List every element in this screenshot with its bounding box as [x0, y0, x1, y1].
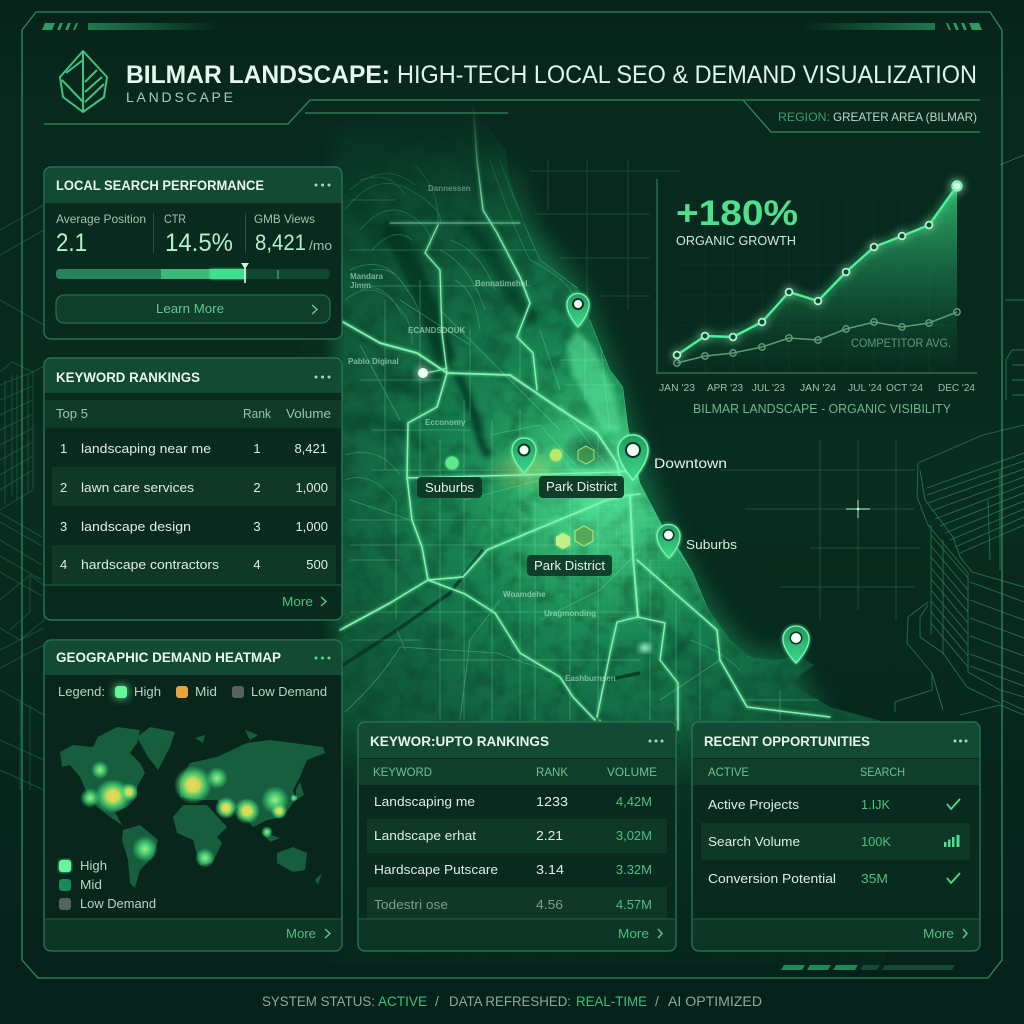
top-right decorative bars [800, 23, 982, 30]
row 4 [367, 887, 667, 919]
row 4: 4.56 [536, 897, 563, 912]
table header: ACTIVE [708, 765, 749, 779]
x axis labels: JAN '23 [659, 382, 695, 394]
row active projects [708, 797, 960, 812]
sea grid upper [530, 160, 680, 310]
top legend: Mid [195, 685, 217, 699]
metric average position [56, 212, 146, 257]
subtitle: LANDSCAPE [126, 89, 233, 105]
row 2 [52, 467, 336, 506]
top legend: High [134, 685, 161, 699]
table header [693, 759, 979, 785]
growth stat: +180% [676, 194, 798, 233]
panel header [45, 640, 341, 675]
map place names: Woamdehe [503, 590, 546, 599]
label park district box lower: Park District [534, 559, 606, 573]
label suburbs box [417, 477, 482, 498]
footer status line: SYSTEM STATUS: [262, 993, 375, 1009]
table header: Top 5 [56, 407, 88, 421]
row 1: 1 [253, 441, 261, 456]
row 1: Landscaping me [374, 794, 475, 809]
row 2: 1,000 [295, 480, 328, 495]
row 1: 1 [60, 441, 67, 456]
table header [359, 759, 675, 785]
chart grid [680, 200, 957, 373]
metric average position: Average Position [56, 212, 146, 226]
label park district box top: Park District [546, 480, 618, 494]
small glow spot [639, 644, 651, 652]
competitor line [674, 309, 960, 366]
label suburbs: Suburbs [686, 537, 738, 552]
light hex marker [556, 533, 570, 549]
growth line [674, 182, 962, 358]
footer status line: / [655, 993, 659, 1009]
metric gmb views: 8,421 [255, 230, 306, 255]
pin suburbs [657, 524, 680, 558]
sea glow [500, 150, 830, 720]
menu dots [314, 656, 330, 660]
panel: keyword rankings [44, 358, 342, 620]
pin north [567, 294, 589, 327]
panel title: RECENT OPPORTUNITIES [704, 734, 870, 749]
city map [324, 106, 882, 846]
footer status line: / [435, 993, 439, 1009]
footer status line [262, 993, 762, 1009]
row 2 [367, 819, 667, 853]
row 4: 4.57M [616, 897, 652, 912]
menu dots [648, 740, 664, 742]
fine street grid [518, 434, 700, 630]
bottom legend: Low Demand [80, 896, 156, 911]
map place names: ECANDSDOUK [408, 326, 466, 335]
footer status line: AI OPTIMIZED [668, 993, 762, 1009]
table header: SEARCH [860, 765, 905, 779]
menu dots [314, 184, 330, 186]
icon: leaf logo [60, 51, 107, 112]
panel: local search performance [44, 167, 342, 339]
panel footer [44, 585, 342, 609]
row 1 [60, 441, 327, 456]
contour lines [345, 160, 740, 670]
decorative isometric buildings left [0, 205, 44, 790]
x axis labels: JAN '24 [800, 382, 836, 394]
panel title: LOCAL SEARCH PERFORMANCE [56, 178, 264, 193]
x axis labels: DEC '24 [938, 382, 975, 394]
panel header [45, 358, 341, 393]
metric average position: 2.1 [56, 229, 87, 257]
menu dots [314, 376, 330, 378]
top legend [58, 685, 327, 699]
main roads [338, 106, 832, 732]
row 1: landscaping near me [81, 441, 211, 456]
heat dot park [550, 449, 562, 461]
panel footer [692, 919, 980, 950]
row search volume [701, 823, 970, 860]
panel title: GEOGRAPHIC DEMAND HEATMAP [56, 650, 281, 665]
title: HIGH-TECH LOCAL SEO & DEMAND VISUALIZATION [397, 61, 977, 89]
row search volume: 100K [861, 834, 891, 849]
top legend: Legend: [58, 685, 105, 699]
panel footer: More [618, 926, 649, 941]
street grid [345, 200, 850, 720]
x axis labels: JUL '23 [752, 382, 785, 394]
row 1: 4,42M [616, 794, 652, 809]
row 4: hardscape contractors [81, 557, 220, 572]
learn more button [56, 295, 330, 323]
table header: Rank [243, 407, 272, 421]
metric ctr: CTR [164, 212, 186, 226]
table header: KEYWORD [373, 765, 432, 779]
row 4: Todestri ose [374, 897, 448, 912]
panel footer [358, 919, 676, 950]
area under growth line [677, 186, 957, 373]
panel: geographic demand heatmap [44, 640, 342, 951]
heat spots [80, 761, 298, 868]
footer status line: REAL-TIME [576, 993, 647, 1009]
world map [60, 727, 325, 888]
row 2: 3,02M [616, 828, 652, 843]
x axis labels: APR '23 [707, 382, 743, 394]
metric ctr: 14.5% [165, 229, 233, 257]
yellow heat glow [490, 450, 560, 492]
metric gmb views: /mo [309, 238, 332, 253]
bottom-right decorative bars [781, 965, 955, 970]
row 4: 500 [306, 557, 328, 572]
metric ctr [164, 212, 233, 257]
dark hex marker one [578, 446, 594, 464]
map place names: Eashburnsen [565, 674, 616, 683]
top legend: Low Demand [251, 685, 327, 699]
table header [45, 400, 341, 428]
panel footer: More [286, 926, 316, 941]
row 3 [60, 519, 328, 534]
map place names [348, 184, 616, 683]
chart caption: BILMAR LANDSCAPE - ORGANIC VISIBILITY [693, 402, 952, 416]
title: BILMAR LANDSCAPE: [126, 61, 390, 89]
panel: keyword upto rankings [358, 722, 676, 951]
panel footer [44, 919, 342, 950]
footer status line: ACTIVE [378, 993, 427, 1009]
table header: Volume [286, 407, 331, 421]
row 2: lawn care services [81, 480, 195, 495]
organic growth chart [657, 179, 977, 416]
pin downtown [618, 435, 648, 480]
map place names: Uragmonding [544, 609, 596, 618]
label suburbs box: Suburbs [425, 481, 474, 495]
chart axes [657, 179, 977, 373]
row conversion potential [708, 871, 960, 886]
panel header [45, 168, 341, 203]
table header: VOLUME [607, 765, 657, 779]
map place names: Pablo Diginal [348, 357, 399, 366]
heat dot suburbs [446, 456, 458, 470]
map place names: Mandara [350, 272, 383, 281]
row 2: 2 [253, 480, 261, 495]
learn more button: Learn More [156, 301, 224, 316]
row 3: Hardscape Putscare [374, 862, 498, 877]
row conversion potential: Conversion Potential [708, 871, 836, 886]
coast line [505, 150, 750, 657]
map details [338, 106, 844, 748]
label downtown: Downtown [654, 456, 727, 471]
row 2: Landscape erhat [374, 828, 476, 843]
label park district box top [539, 476, 624, 498]
row 3: 3 [253, 519, 261, 534]
row 1 [374, 794, 652, 809]
sea grid lower with sparkle [720, 440, 920, 620]
dark heat hole [564, 430, 612, 470]
row 2: 2.21 [536, 828, 563, 843]
x axis labels: OCT '24 [886, 382, 923, 394]
region label: REGION: [778, 110, 830, 124]
dark hex marker two [575, 526, 593, 546]
row 4: 4 [253, 557, 261, 572]
row 3: 1,000 [295, 519, 328, 534]
panel footer: More [282, 594, 313, 609]
competitor label: COMPETITOR AVG. [851, 338, 951, 350]
row active projects: 1.IJK [861, 797, 890, 812]
row 1: 1233 [536, 794, 568, 809]
growth stat label: ORGANIC GROWTH [676, 233, 796, 248]
table header: RANK [536, 765, 568, 779]
terrain blotches [342, 188, 844, 748]
metric gmb views [254, 212, 332, 255]
row 1: 8,421 [294, 441, 327, 456]
bottom legend: High [80, 858, 107, 873]
row active projects: Active Projects [708, 797, 800, 812]
x axis labels [659, 382, 975, 394]
bottom legend [59, 858, 156, 911]
region label: GREATER AREA (BILMAR) [833, 110, 977, 124]
footer status line: DATA REFRESHED: [449, 993, 571, 1009]
panel title: KEYWORD RANKINGS [56, 370, 200, 385]
river [340, 550, 640, 680]
lakefront bright district [567, 330, 622, 432]
row search volume: Search Volume [708, 834, 800, 849]
row 3: 3.32M [616, 862, 652, 877]
pin south [783, 626, 809, 663]
title [126, 61, 977, 89]
menu dots [954, 740, 968, 742]
panel: recent opportunities [692, 722, 980, 951]
panel header [693, 722, 980, 758]
row 3 [374, 862, 652, 877]
row 3: 3.14 [536, 862, 564, 877]
map place names: Ecconomy [425, 418, 466, 427]
map place names: Jimm [350, 281, 371, 290]
downtown glow [518, 404, 661, 568]
row conversion potential: 35M [861, 871, 888, 886]
pin park [512, 438, 536, 473]
decorative isometric buildings right [895, 155, 1024, 715]
row 4: 4 [60, 557, 67, 572]
progress bar [56, 263, 330, 283]
row 2: 2 [60, 480, 67, 495]
row 4 [52, 545, 336, 584]
x axis labels: JUL '24 [848, 382, 882, 394]
map place names: Bennatimehel [475, 279, 527, 288]
header rule lines [44, 100, 980, 132]
panel footer: More [923, 926, 954, 941]
map place names: Dannessen [428, 184, 471, 193]
glowing location dot [418, 368, 428, 378]
land [324, 130, 882, 864]
panel title: KEYWOR:UPTO RANKINGS [370, 734, 549, 749]
map markers [417, 294, 809, 663]
label park district box lower [527, 555, 612, 576]
top-left decorative bars [42, 23, 223, 30]
bottom legend: Mid [80, 877, 102, 892]
row 3: 3 [60, 519, 67, 534]
row 3: landscape design [81, 519, 191, 534]
panel header [359, 722, 676, 758]
metric gmb views: GMB Views [254, 212, 315, 226]
terrain dark bands [345, 180, 690, 665]
